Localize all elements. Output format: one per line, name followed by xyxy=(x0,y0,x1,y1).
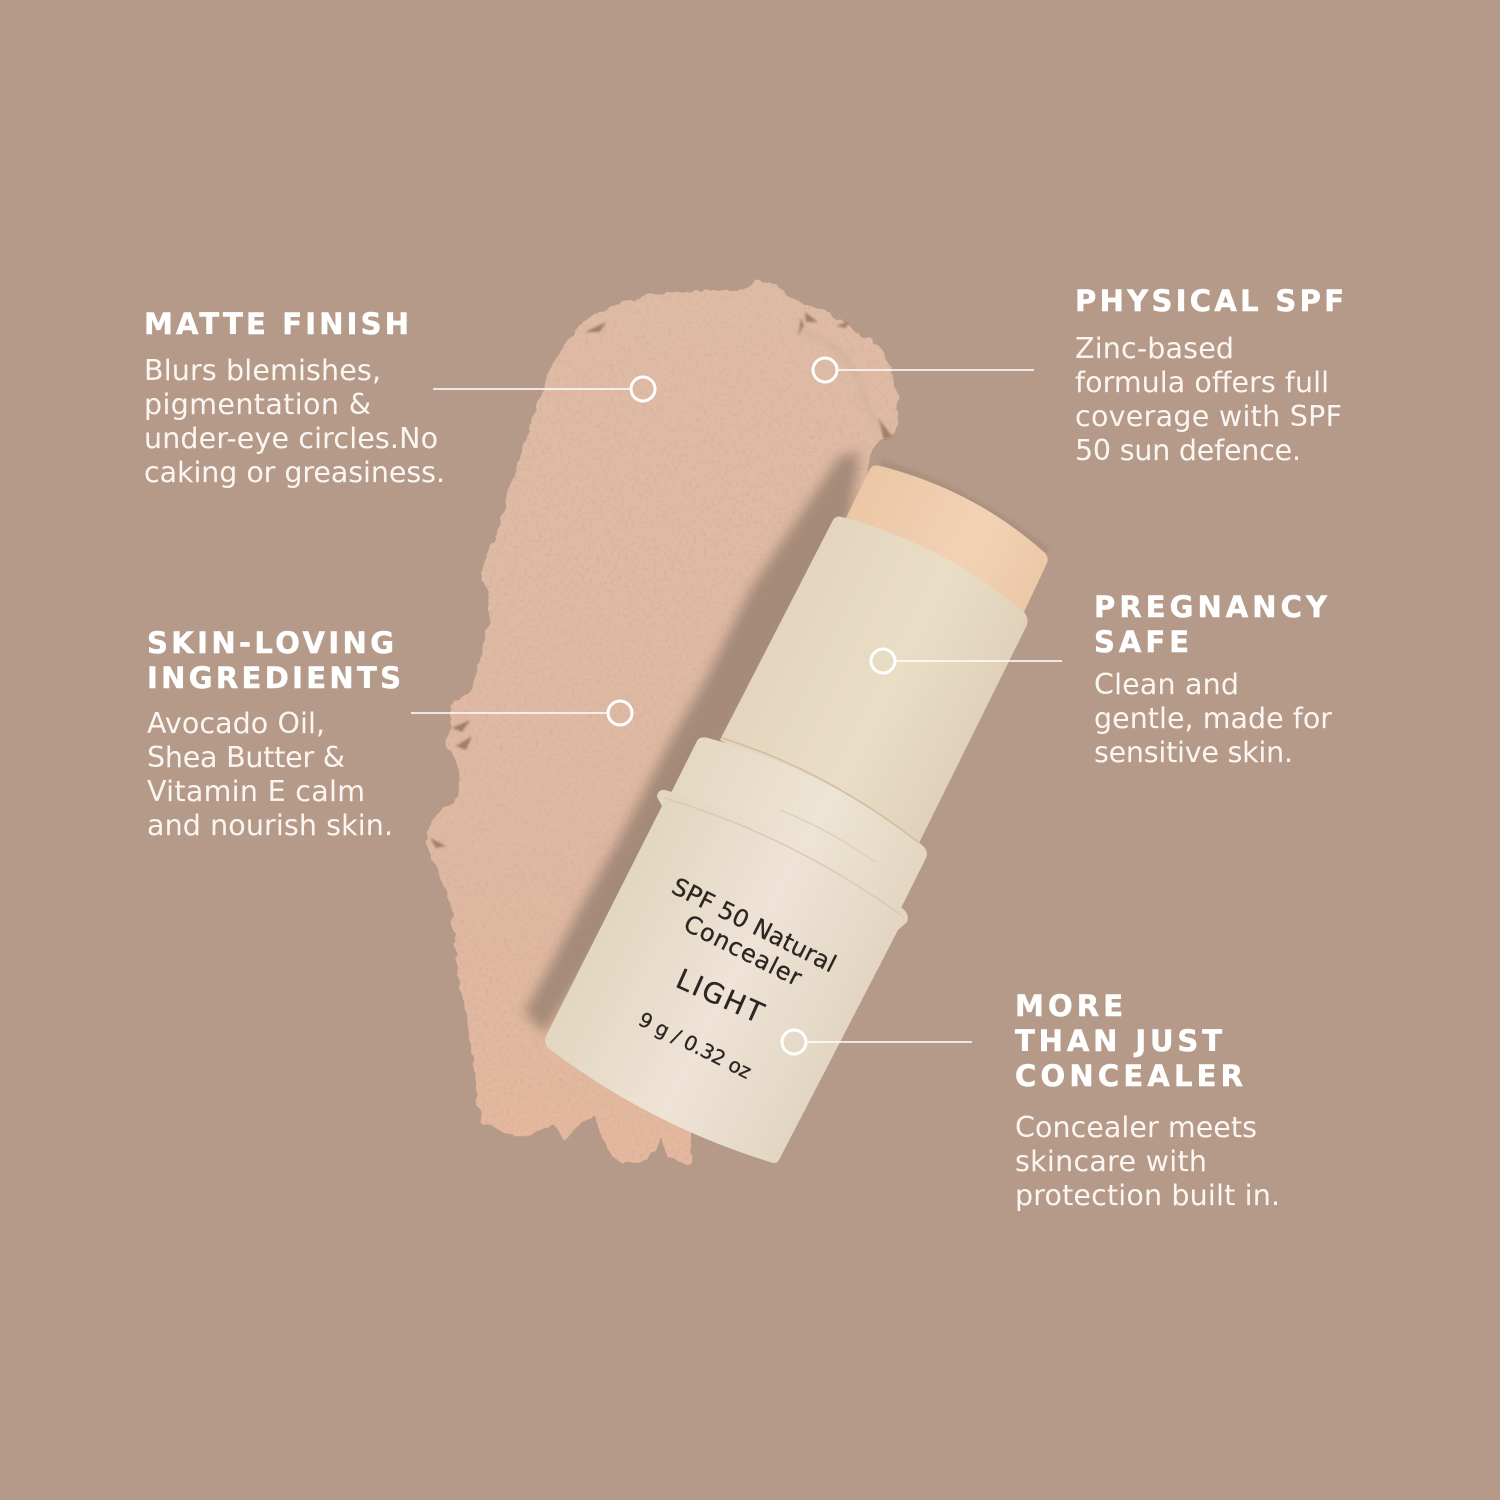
body: matte finish: caking or greasiness. xyxy=(144,456,445,489)
shadow of product on swatch xyxy=(524,452,1048,1033)
callout: pregnancy safe marker xyxy=(871,649,1062,673)
concealer swatch xyxy=(426,280,899,1165)
body: pregnancy safe xyxy=(1094,668,1332,769)
concealer bullet xyxy=(845,465,1048,612)
body: physical spf xyxy=(1075,332,1342,467)
body: physical spf: 50 sun defence. xyxy=(1075,434,1301,467)
body: matte finish xyxy=(144,354,445,489)
heading: physical spf: PHYSICAL SPF xyxy=(1075,284,1344,318)
body: skin-loving ingredients xyxy=(147,707,393,842)
body: skin-loving ingredients: Shea Butter & xyxy=(147,741,345,774)
body: matte finish: Blurs blemishes, xyxy=(144,354,381,387)
heading: pregnancy safe: PREGNANCY xyxy=(1094,590,1328,624)
text block: more than just concealer xyxy=(1015,989,1280,1212)
body: more than just concealer: protection built in. xyxy=(1015,1179,1280,1212)
collar xyxy=(670,737,927,918)
body: more than just concealer: Concealer meets xyxy=(1015,1111,1257,1144)
heading: skin-loving ingredients: SKIN-LOVING xyxy=(147,626,394,660)
heading: pregnancy safe xyxy=(1094,590,1328,659)
body: more than just concealer: skincare with xyxy=(1015,1145,1207,1178)
base xyxy=(545,790,908,1163)
body: skin-loving ingredients: Avocado Oil, xyxy=(147,707,325,740)
swatch highlight ridge xyxy=(800,330,880,428)
heading: skin-loving ingredients xyxy=(147,626,401,695)
label: shade: LIGHT xyxy=(671,962,769,1030)
callout: more than just concealer marker xyxy=(782,1030,972,1054)
callout: skin-loving ingredients marker xyxy=(411,701,632,725)
body: pregnancy safe: gentle, made for xyxy=(1094,702,1332,735)
heading: more than just concealer xyxy=(1015,989,1243,1093)
swatch cracks xyxy=(430,312,892,848)
text block: pregnancy safe xyxy=(1094,590,1332,769)
heading: pregnancy safe: SAFE xyxy=(1094,625,1189,659)
rim lines xyxy=(664,738,918,917)
heading: more than just concealer: THAN JUST xyxy=(1015,1024,1222,1058)
body: pregnancy safe: sensitive skin. xyxy=(1094,736,1293,769)
text block: physical spf xyxy=(1075,284,1344,467)
body: pregnancy safe: Clean and xyxy=(1094,668,1239,701)
callout: physical spf marker xyxy=(813,358,1034,382)
body: skin-loving ingredients: Vitamin E calm xyxy=(147,775,365,808)
body: more than just concealer xyxy=(1015,1111,1280,1212)
callout: matte finish marker xyxy=(433,377,655,401)
body: skin-loving ingredients: and nourish skin. xyxy=(147,809,393,842)
body: physical spf: formula offers full xyxy=(1075,366,1329,399)
label: net weight: 9 g / 0.32 oz xyxy=(635,1007,755,1084)
label: product name: SPF 50 Natural xyxy=(667,872,841,978)
product stick xyxy=(545,465,1048,1163)
body: matte finish: pigmentation & xyxy=(144,388,371,421)
heading: more than just concealer: MORE xyxy=(1015,989,1123,1023)
text block: skin-loving ingredients xyxy=(147,626,401,842)
label: product type: Concealer xyxy=(679,909,806,992)
body: matte finish: under-eye circles.No xyxy=(144,422,438,455)
inner tube xyxy=(720,517,1028,845)
body: physical spf: Zinc-based xyxy=(1075,332,1234,365)
heading: more than just concealer: CONCEALER xyxy=(1015,1059,1243,1093)
heading: matte finish: MATTE FINISH xyxy=(144,307,409,341)
text block: matte finish xyxy=(144,307,445,489)
body: physical spf: coverage with SPF xyxy=(1075,400,1342,433)
heading: skin-loving ingredients: INGREDIENTS xyxy=(147,661,401,695)
